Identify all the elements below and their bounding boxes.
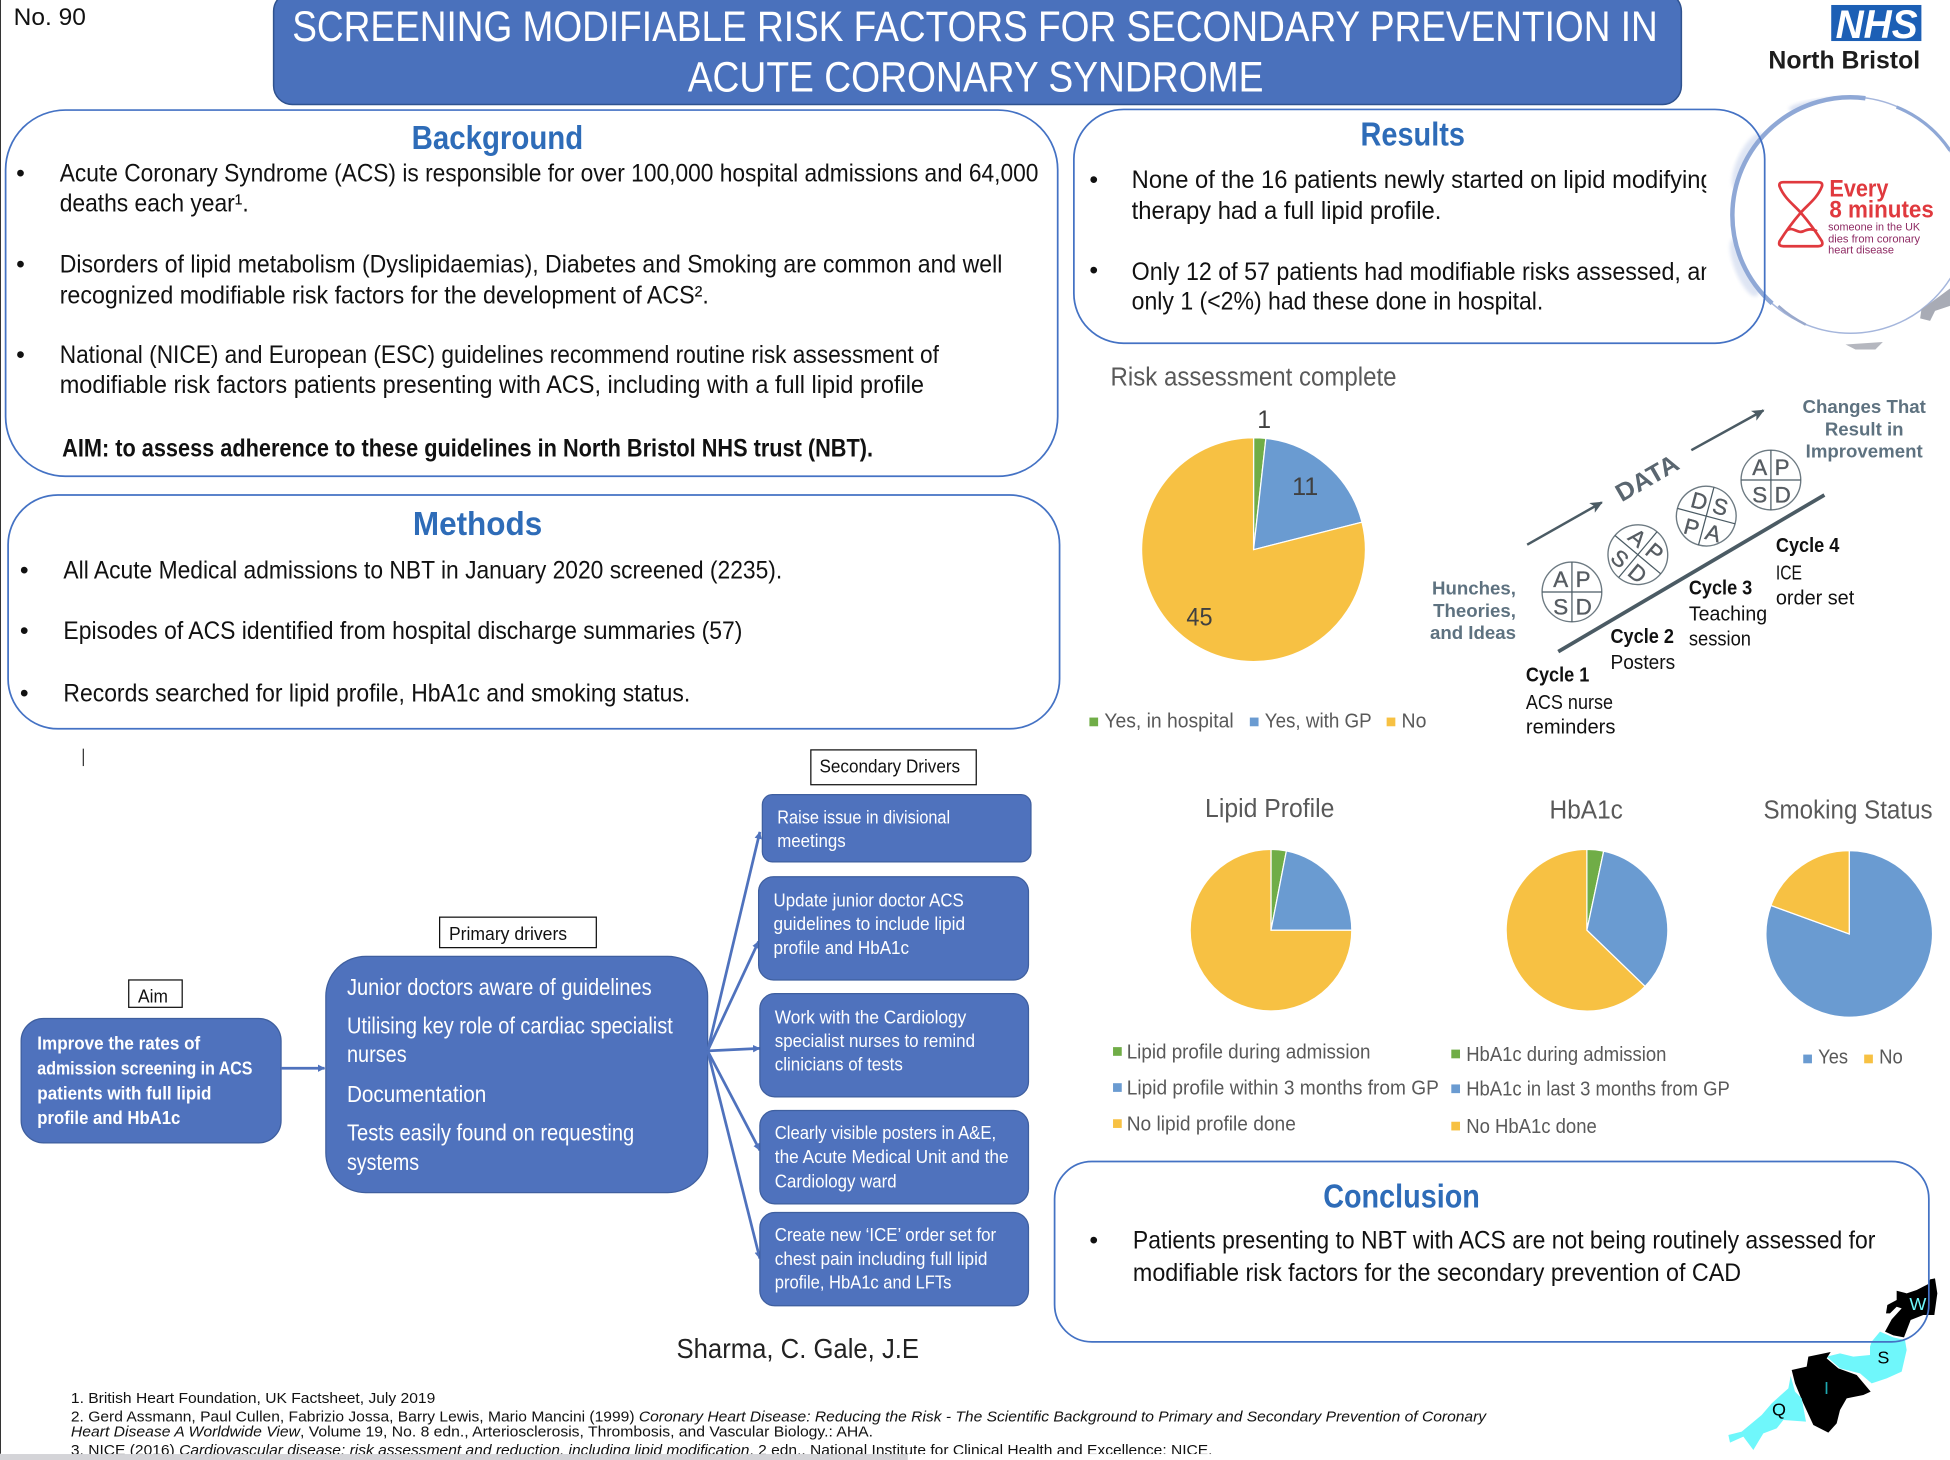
ramp line (1558, 495, 1824, 652)
box: secondary driver 1 (762, 795, 1031, 862)
changes label: Improvement (1806, 441, 1923, 462)
title banner: ACUTE CORONARY SYNDROME (688, 53, 1264, 100)
box: secondary driver 5 (760, 1213, 1028, 1306)
icon: hourglass (1779, 182, 1822, 246)
chart title: Lipid Profile (1205, 793, 1334, 823)
references: Heart Disease A Worldwide View , Volume 19, No. 8 edn., Arteriosclerosis, Thrombosis, and Vascular Biology.: AHA. (71, 1423, 873, 1440)
box: primary drivers: Junior doctors aware of guidelines (347, 974, 652, 1000)
every 8 minutes circle graphic (1724, 95, 1950, 349)
methods bullets (20, 556, 782, 707)
label: primary drivers (440, 917, 596, 948)
panel: methods (8, 495, 1060, 729)
data arrows: DATA (1611, 449, 1684, 508)
box: secondary driver 2: Update junior doctor ACS (774, 890, 964, 911)
conclusion bullet (1089, 1227, 1875, 1287)
references: 3. NICE (2016) Cardiovascular disease: risk assessment and reduction, including lipid modification . 2 edn., National Institute for Clinical Health and Excellence: NICE. (71, 1442, 1213, 1459)
cycle circle 2: D (1623, 559, 1652, 588)
box: aim: profile and HbA1c (37, 1107, 180, 1128)
label: secondary drivers (811, 750, 976, 785)
panel: background (6, 110, 1058, 476)
background bullets (16, 160, 1038, 399)
map of regions: S (1877, 1347, 1889, 1367)
arrows: primary to secondary (708, 832, 760, 1259)
box: secondary driver 1: meetings (777, 830, 846, 851)
pie: HbA1c (1506, 849, 1668, 1011)
cycle 4 label: order set (1776, 586, 1855, 609)
changes label: Result in (1825, 418, 1904, 439)
methods bullets: • (20, 556, 29, 584)
title banner (274, 0, 1681, 104)
box: secondary driver 5: Create new ‘ICE’ order set for (775, 1224, 996, 1245)
results bullets: Only 12 of 57 patients had modifiable risks assessed, and (1132, 258, 1726, 286)
legend: lipid profile: Lipid profile during admission (1127, 1041, 1370, 1063)
results bullets: therapy had a full lipid profile. (1132, 197, 1441, 225)
cycle circle 3: S (1710, 493, 1731, 521)
legend: smoking status: Yes (1818, 1046, 1848, 1068)
label: aim (129, 980, 182, 1007)
changes label (1803, 396, 1926, 462)
results bullets: • (1089, 257, 1098, 285)
poster number: No. 90 (14, 5, 86, 31)
pie: lipid profile (1190, 849, 1352, 1011)
box: secondary driver 2: guidelines to include lipid (774, 913, 965, 934)
every 8 minutes circle graphic: heart disease (1828, 245, 1894, 257)
legend: HbA1c: HbA1c during admission (1466, 1044, 1666, 1066)
background bullets: Acute Coronary Syndrome (ACS) is responsible for over 100,000 hospital admissions and 64,000 (60, 160, 1038, 188)
references: 1. British Heart Foundation, UK Factsheet, July 2019 (71, 1390, 435, 1407)
chart: HbA1c (1451, 794, 1730, 1138)
cycle circle 4 (1741, 450, 1801, 510)
heading: conclusion: Conclusion (1323, 1179, 1480, 1216)
box: aim: patients with full lipid (37, 1082, 211, 1103)
results bullets (1089, 166, 1726, 316)
box: secondary driver 3: specialist nurses to remind (775, 1030, 975, 1051)
legend: lipid profile (1113, 1041, 1439, 1135)
box: secondary driver 3: clinicians of tests (775, 1054, 903, 1075)
cycle 1 label (1526, 663, 1615, 739)
references: 2. Gerd Assmann, Paul Cullen, Fabrizio Jossa, Barry Lewis, Mario Mancini (1999) Coronary Heart Disease: Reducing the Risk - The Scientific Background to Primary and Secondary Prevention of Coronary (71, 1408, 1488, 1425)
hunches label: and Ideas (1430, 622, 1516, 643)
cycle 1 label: reminders (1526, 716, 1615, 739)
NHS North Bristol logo: North Bristol (1768, 46, 1920, 74)
every 8 minutes circle graphic: someone in the UK (1828, 222, 1921, 234)
conclusion bullet: modifiable risk factors for the secondary prevention of CAD (1133, 1259, 1741, 1287)
chart: risk assessment complete: 45 (1186, 604, 1213, 632)
box: secondary driver 4: Cardiology ward (775, 1171, 897, 1192)
legend: risk assessment: Yes, in hospital (1104, 711, 1234, 733)
box: primary drivers: Documentation (347, 1081, 486, 1107)
chart: risk assessment complete: 11 (1292, 473, 1318, 501)
arrow: aim to primary (281, 1067, 325, 1069)
label: primary drivers: Primary drivers (449, 923, 567, 944)
legend: risk assessment (1089, 711, 1426, 733)
background bullets: Disorders of lipid metabolism (Dyslipidaemias), Diabetes and Smoking are common and well (60, 250, 1002, 278)
cycle circle 4: A (1752, 455, 1767, 480)
cycle 4 label: Cycle 4 (1776, 534, 1840, 557)
cycle circle 4: P (1775, 455, 1790, 480)
background bullets: • (16, 250, 25, 278)
map of regions: I (1824, 1378, 1829, 1398)
methods bullets: • (20, 679, 29, 707)
background bullets: • (16, 160, 25, 188)
cycle 3 label: Cycle 3 (1689, 576, 1752, 599)
driver diagram (21, 750, 1031, 1306)
cycle circle 4: D (1775, 482, 1791, 507)
legend: smoking status (1803, 1046, 1903, 1068)
cycle circle 2: A (1624, 524, 1651, 552)
PDSA improvement ramp diagram (1430, 396, 1926, 739)
panel: conclusion (1055, 1162, 1929, 1342)
box: secondary driver 2 (759, 877, 1028, 980)
map of regions: Q (1772, 1399, 1786, 1419)
heading: background: Background (412, 120, 583, 157)
stray cursor mark (82, 749, 84, 766)
methods bullets: All Acute Medical admissions to NBT in January 2020 screened (2235). (63, 556, 782, 584)
methods bullets: • (20, 617, 29, 645)
legend: risk assessment: Yes, with GP (1265, 711, 1372, 733)
cycle circle 2 (1596, 513, 1680, 597)
cycle 4 label: ICE (1776, 562, 1802, 585)
cycle 1 label: ACS nurse (1526, 691, 1613, 714)
heading: methods: Methods (413, 506, 542, 543)
label: aim: Aim (138, 985, 168, 1006)
results bullets: only 1 (<2%) had these done in hospital. (1132, 288, 1543, 316)
cycle circle 3 (1670, 480, 1743, 553)
chart: lipid profile (1113, 793, 1439, 1135)
hunches label: Theories, (1433, 600, 1516, 621)
data arrows (1527, 410, 1763, 545)
cycle circle 1: A (1553, 567, 1568, 592)
results bullets: • (1089, 166, 1098, 194)
box: aim: admission screening in ACS (37, 1057, 252, 1078)
cycle 4 label (1776, 534, 1855, 609)
every 8 minutes circle graphic: 8 minutes (1829, 198, 1934, 224)
cycle 3 label: Teaching (1689, 603, 1767, 626)
background bullets: deaths each year¹. (60, 189, 249, 217)
label: secondary drivers: Secondary Drivers (820, 755, 960, 776)
background bullets: modifiable risk factors patients presenting with ACS, including with a full lipid profile (60, 371, 924, 399)
cycle circle 3: P (1681, 514, 1702, 542)
legend: risk assessment: No (1402, 711, 1426, 733)
pie: smoking status (1766, 851, 1933, 1017)
map of regions: W (1909, 1294, 1926, 1314)
chart: smoking status (1763, 794, 1933, 1068)
cycle circle 1: D (1576, 594, 1592, 619)
conclusion bullet: Patients presenting to NBT with ACS are not being routinely assessed for (1133, 1227, 1875, 1255)
chart title: Smoking Status (1763, 794, 1933, 824)
every 8 minutes circle graphic: Every (1829, 176, 1888, 202)
cycle 2 label: Posters (1610, 651, 1675, 674)
box: secondary driver 5: profile, HbA1c and LFTs (775, 1271, 951, 1292)
box: secondary driver 4 (760, 1111, 1028, 1204)
background bullets: National (NICE) and European (ESC) guidelines recommend routine risk assessment of (60, 341, 939, 369)
chart: risk assessment complete (1089, 362, 1426, 733)
cycle circle 2: S (1606, 544, 1633, 573)
legend: lipid profile: Lipid profile within 3 months from GP (1127, 1077, 1439, 1099)
cycle circle 2: P (1641, 538, 1668, 567)
cycle circle 1: P (1576, 567, 1591, 592)
box: secondary driver 5: chest pain including full lipid (775, 1248, 987, 1269)
box: primary drivers: systems (347, 1149, 419, 1175)
cycle 3 label (1689, 576, 1767, 650)
chart title: HbA1c (1550, 794, 1623, 824)
legend: lipid profile: No lipid profile done (1127, 1113, 1296, 1135)
box: secondary driver 4: the Acute Medical Unit and the (775, 1146, 1009, 1167)
aim statement: AIM: to assess adherence to these guidelines in North Bristol NHS trust (NBT). (62, 434, 873, 462)
cycle circle 3: A (1703, 519, 1724, 547)
hunches label: Hunches, (1432, 577, 1516, 598)
results bullets: None of the 16 patients newly started on lipid modifying (1132, 166, 1714, 194)
legend: HbA1c (1451, 1044, 1730, 1138)
title banner: SCREENING MODIFIABLE RISK FACTORS FOR SECONDARY PREVENTION IN (292, 3, 1658, 50)
background bullets: recognized modifiable risk factors for the development of ACS². (60, 281, 709, 309)
cycle circle 4: S (1752, 482, 1767, 507)
box: primary drivers (326, 956, 708, 1193)
NHS North Bristol logo (1768, 3, 1921, 74)
box: primary drivers: nurses (347, 1041, 407, 1067)
conclusion bullet: • (1089, 1227, 1098, 1255)
cycle 2 label: Cycle 2 (1610, 625, 1674, 648)
box: aim (21, 1019, 281, 1143)
cycle circle 3: D (1688, 487, 1710, 515)
cycle circle 1: S (1553, 594, 1568, 619)
box: aim: Improve the rates of (37, 1033, 201, 1054)
chart: risk assessment complete: 1 (1257, 406, 1271, 434)
box: primary drivers: Tests easily found on requesting (347, 1119, 634, 1145)
box: primary drivers: Utilising key role of cardiac specialist (347, 1012, 673, 1038)
NHS North Bristol logo: NHS (1836, 3, 1918, 47)
box: secondary driver 3 (760, 994, 1028, 1097)
cycle 1 label: Cycle 1 (1526, 663, 1589, 686)
chart title: Risk assessment complete (1111, 362, 1397, 392)
changes label: Changes That (1803, 396, 1926, 417)
methods bullets: Episodes of ACS identified from hospital discharge summaries (57) (63, 617, 742, 645)
background bullets: • (16, 341, 25, 369)
map of regions (1728, 1278, 1937, 1450)
pie: risk assessment (1142, 438, 1365, 662)
every 8 minutes circle graphic: dies from coronary (1828, 234, 1921, 246)
cycle 3 label: session (1689, 627, 1751, 650)
legend: HbA1c: No HbA1c done (1466, 1116, 1597, 1138)
box: secondary driver 3: Work with the Cardiology (775, 1006, 967, 1027)
heading: results: Results (1361, 117, 1465, 154)
box: secondary driver 1: Raise issue in divisional (777, 806, 950, 827)
legend: HbA1c: HbA1c in last 3 months from GP (1466, 1079, 1730, 1101)
hunches label (1430, 577, 1516, 643)
box: secondary driver 2: profile and HbA1c (774, 937, 909, 958)
box: secondary driver 4: Clearly visible posters in A&E, (775, 1122, 996, 1143)
cycle circle 1 (1542, 562, 1602, 622)
cycle 2 label (1610, 625, 1675, 674)
panel: results (1074, 109, 1765, 343)
methods bullets: Records searched for lipid profile, HbA1c and smoking status. (63, 679, 690, 707)
references (71, 1390, 1488, 1459)
legend: smoking status: No (1879, 1046, 1903, 1068)
authors: Sharma, C. Gale, J.E (677, 1333, 919, 1364)
